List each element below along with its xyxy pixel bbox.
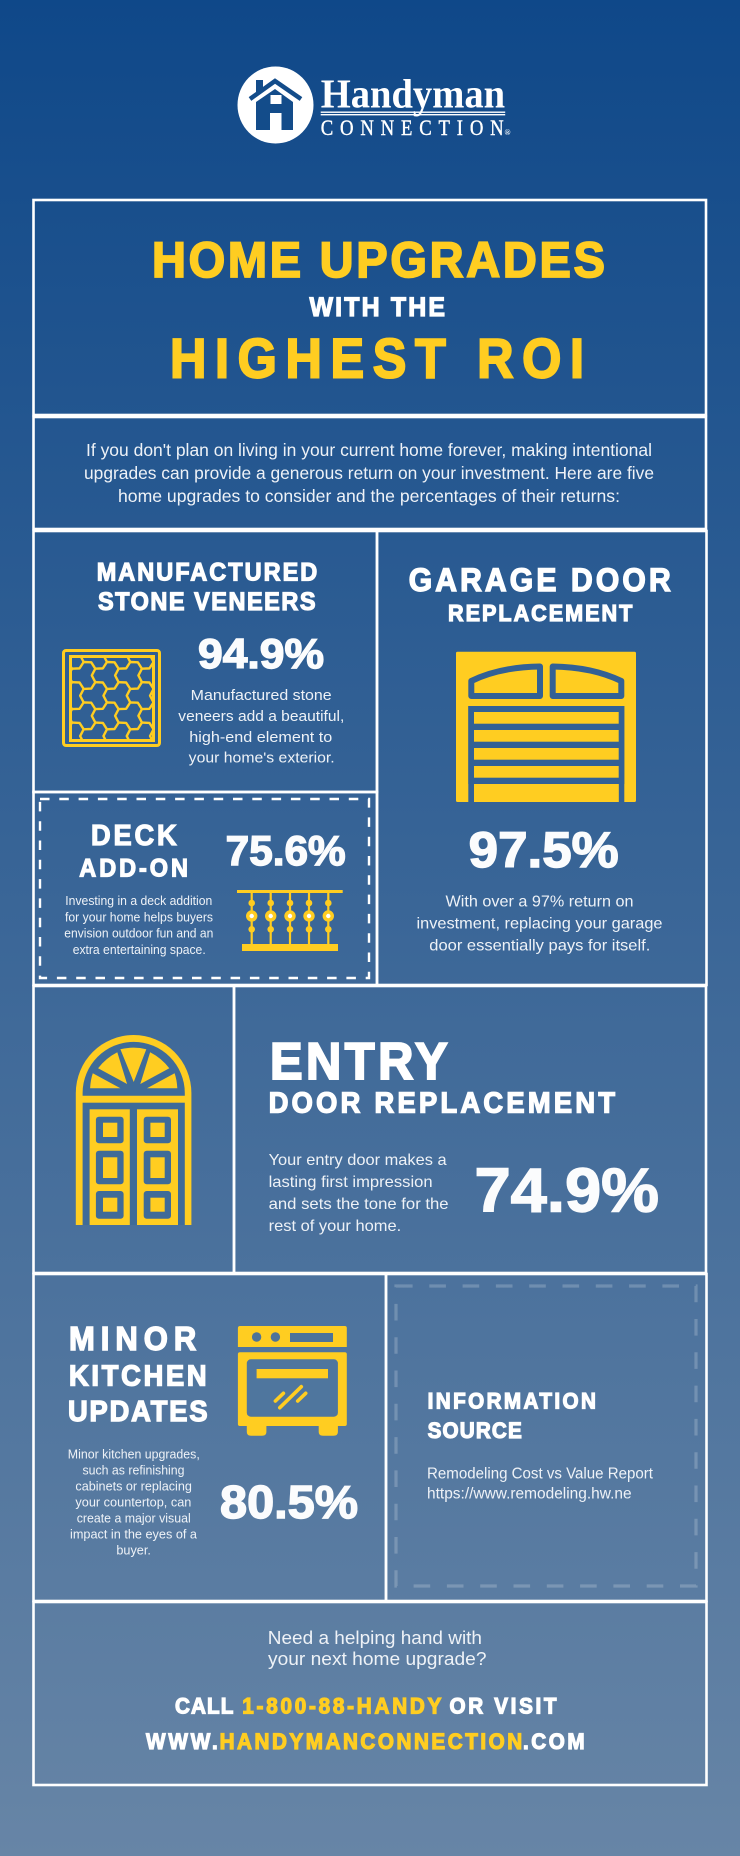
website line: .COM <box>523 1729 585 1754</box>
heading: KITCHEN <box>69 1360 207 1392</box>
percentage: 74.9% <box>474 1157 659 1226</box>
heading <box>68 1320 207 1427</box>
panel: entry door icon <box>34 986 234 1273</box>
heading: highest roi: HIGHEST ROI <box>170 328 584 390</box>
prompt text: Need a helping hand with <box>268 1628 482 1648</box>
description: impact in the eyes of a <box>70 1527 197 1541</box>
description: veneers add a beautiful, <box>178 708 344 725</box>
source text: https://www.remodeling.hw.ne <box>427 1485 632 1502</box>
icon: house in circle <box>238 66 314 144</box>
panel: garage door replacement <box>377 531 706 985</box>
heading: UPDATES <box>68 1395 207 1427</box>
panel: information source <box>386 1274 706 1601</box>
description <box>178 687 344 767</box>
panel: manufactured stone veneers <box>34 531 377 792</box>
heading: MINOR <box>69 1320 196 1357</box>
icon: deck railing <box>237 890 343 951</box>
panel: introduction: If you don't plan on living in your current home forever, making intentional <box>86 440 652 460</box>
source text: Remodeling Cost vs Value Report <box>427 1465 654 1482</box>
description: for your home helps buyers <box>65 911 213 925</box>
description: your countertop, can <box>75 1495 191 1509</box>
icon: garage door <box>456 652 636 802</box>
description: lasting first impression <box>269 1174 433 1191</box>
heading: ENTRY <box>270 1032 448 1090</box>
heading: home upgrades: HOME UPGRADES <box>152 233 605 288</box>
description: buyer. <box>116 1543 151 1557</box>
website line: HANDYMANCONNECTION <box>220 1729 522 1754</box>
panel: introduction: home upgrades to consider and the percentages of their returns: <box>118 486 620 506</box>
description <box>416 894 663 955</box>
description: investment, replacing your garage <box>416 916 663 933</box>
heading: DOOR REPLACEMENT <box>269 1087 615 1119</box>
description: envision outdoor fun and an <box>64 927 213 941</box>
panel: introduction: upgrades can provide a generous return on your investment. Here are five <box>84 463 654 483</box>
description: create a major visual <box>77 1511 191 1525</box>
heading: STONE VENEERS <box>98 588 316 616</box>
heading <box>79 819 188 883</box>
percentage: 80.5% <box>220 1476 358 1528</box>
percentage: 75.6% <box>226 827 346 874</box>
description: Manufactured stone <box>191 687 332 704</box>
heading: SOURCE <box>428 1418 522 1443</box>
description: Your entry door makes a <box>269 1152 447 1169</box>
panel: deck add-on <box>34 792 377 985</box>
description: Minor kitchen upgrades, <box>68 1447 200 1461</box>
logo: Handyman Connection <box>238 66 510 144</box>
panel: title <box>34 200 706 415</box>
description: extra entertaining space. <box>73 943 206 957</box>
panel: minor kitchen updates <box>34 1274 386 1601</box>
description: and sets the tone for the <box>269 1196 449 1213</box>
phone line <box>175 1694 557 1718</box>
phone line: 1-800-88-HANDY <box>242 1694 441 1718</box>
wordmark: CONNECTION <box>321 117 504 140</box>
description: door essentially pays for itself. <box>429 938 650 955</box>
description: cabinets or replacing <box>75 1479 192 1493</box>
percentage: 97.5% <box>469 822 619 878</box>
description <box>68 1447 200 1557</box>
prompt text: your next home upgrade? <box>268 1649 486 1669</box>
heading: GARAGE DOOR <box>409 562 671 598</box>
heading <box>428 1389 596 1443</box>
heading <box>409 562 671 626</box>
description: Investing in a deck addition <box>65 894 212 908</box>
prompt text <box>268 1628 486 1669</box>
icon: entry door <box>76 1035 191 1225</box>
wordmark <box>321 72 510 140</box>
heading: DECK <box>91 819 177 851</box>
wordmark: ® <box>504 128 510 137</box>
description <box>64 894 213 957</box>
phone line: OR VISIT <box>450 1694 557 1718</box>
percentage: 94.9% <box>198 630 324 677</box>
heading <box>97 559 317 616</box>
description: such as refinishing <box>82 1463 185 1477</box>
wordmark: Handyman <box>321 72 505 117</box>
panel: introduction <box>34 417 706 529</box>
description: high-end element to <box>189 729 332 746</box>
description: rest of your home. <box>269 1218 401 1235</box>
icon: stone tile <box>62 649 161 747</box>
heading: with the: WITH THE <box>310 293 445 322</box>
heading: MANUFACTURED <box>97 559 317 587</box>
panel: call to action <box>34 1602 706 1785</box>
description: your home's exterior. <box>189 750 335 767</box>
panel: entry door replacement <box>234 986 706 1273</box>
phone line: CALL <box>175 1694 233 1718</box>
website line <box>146 1729 585 1754</box>
heading: ADD-ON <box>79 855 188 883</box>
description: With over a 97% return on <box>446 894 634 911</box>
description <box>269 1152 449 1235</box>
heading <box>269 1032 615 1119</box>
heading: INFORMATION <box>428 1389 596 1413</box>
source text <box>427 1465 654 1502</box>
heading: REPLACEMENT <box>448 600 633 626</box>
website line: WWW. <box>146 1729 218 1754</box>
icon: oven <box>238 1326 347 1436</box>
